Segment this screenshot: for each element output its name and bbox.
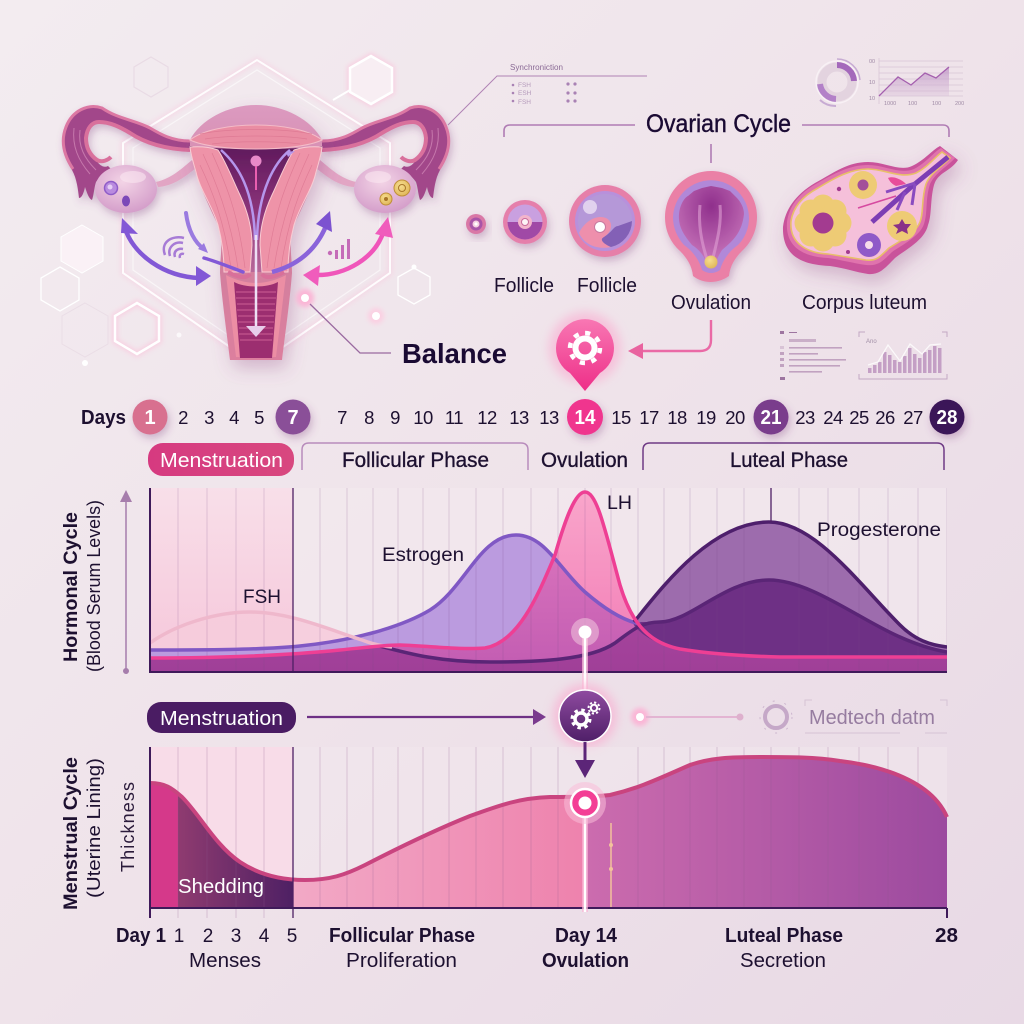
day timeline: 1 — [144, 407, 156, 429]
LH and estrogen overlap — [392, 561, 634, 660]
LH area — [556, 494, 634, 620]
phase labels: Luteal Phase — [730, 449, 848, 472]
day timeline: 26 — [875, 407, 895, 428]
menstrual cycle chart — [150, 747, 947, 918]
day timeline: 9 — [390, 407, 400, 428]
bottom axis labels: 4 — [259, 926, 270, 947]
icon: gear hub — [553, 684, 617, 748]
FSH area — [294, 620, 347, 645]
lower purple area — [151, 630, 947, 671]
bottom axis labels: Proliferation — [346, 949, 457, 972]
synchronization note: FSH — [518, 99, 531, 106]
lower dark curve — [380, 580, 947, 662]
day timeline: 17 — [639, 407, 659, 428]
bottom axis labels: 5 — [287, 926, 297, 947]
arrow: ovulation to balance pin — [628, 320, 711, 359]
day timeline: Days — [81, 407, 126, 429]
day timeline: 24 — [823, 407, 843, 428]
medtech data tag — [631, 700, 947, 733]
ovulating follicle — [665, 171, 757, 282]
bottom axis labels — [116, 924, 958, 972]
day timeline: 28 — [936, 407, 958, 429]
follicle stage 3 — [569, 185, 641, 257]
medtech data tag: Medtech datm — [809, 707, 935, 729]
ovarian stage labels: Ovulation — [671, 292, 751, 314]
line chart: 100 — [908, 101, 917, 107]
LH curve — [150, 492, 947, 658]
bottom axis labels: Menses — [189, 949, 261, 972]
left fallopian tube and ovary — [62, 106, 196, 213]
donut chart — [816, 59, 860, 106]
day timeline: 15 — [611, 407, 631, 428]
day timeline: 23 — [795, 407, 815, 428]
day timeline: 4 — [229, 407, 239, 428]
hormone labels: Progesterone — [817, 519, 941, 541]
day timeline: 8 — [364, 407, 374, 428]
icon: signal bars — [328, 239, 350, 259]
menstruation pill and arrow: Menstruation — [160, 707, 283, 730]
day timeline: 12 — [477, 407, 497, 428]
progesterone curve — [634, 522, 947, 647]
day timeline: 13 — [509, 407, 529, 428]
heading: ovarian cycle — [504, 110, 949, 163]
FSH curve — [150, 612, 392, 647]
bottom axis labels: 2 — [203, 926, 213, 947]
menstrual chart axis title: (Uterine Lining) — [84, 758, 104, 898]
day timeline: 13 — [539, 407, 559, 428]
day timeline: 5 — [254, 407, 264, 428]
day timeline: 19 — [696, 407, 716, 428]
hormonal chart axis title: (Blood Serum Levels) — [84, 500, 104, 672]
estrogen area — [151, 536, 552, 656]
day timeline: 27 — [903, 407, 923, 428]
day timeline: 14 — [574, 407, 596, 429]
hormone labels — [243, 492, 941, 608]
day timeline: 10 — [413, 407, 433, 428]
line chart: 1000 — [884, 101, 896, 107]
bottom axis labels: 1 — [174, 926, 184, 947]
corpus luteum illustration — [783, 146, 958, 274]
estrogen curve — [150, 535, 640, 650]
arrow: down to lining — [575, 742, 595, 778]
line chart: 00 — [869, 59, 875, 65]
right purple arrow — [272, 211, 332, 272]
bottom axis labels: 3 — [231, 926, 241, 947]
right fallopian tube and ovary — [316, 106, 450, 213]
day timeline: 18 — [667, 407, 687, 428]
phase labels: Follicular Phase — [342, 449, 489, 472]
decorative hexagon network — [41, 56, 430, 357]
day timeline: 7 — [337, 407, 347, 428]
follicle stage 2 — [503, 200, 547, 244]
heading: ovarian cycle: Ovarian Cycle — [646, 110, 791, 138]
synchronization note: FSH — [518, 82, 531, 89]
progesterone area — [634, 524, 947, 650]
bottom axis labels: Day 1 — [116, 924, 166, 947]
callout: balance: Balance — [402, 338, 507, 369]
ovulation marker on lining — [564, 782, 613, 912]
hormonal cycle chart — [150, 488, 947, 672]
bottom axis labels: Luteal Phase — [725, 924, 843, 947]
hormone labels: FSH — [243, 586, 281, 608]
menstrual chart axis title: Thickness — [118, 782, 138, 872]
ovarian stage labels — [494, 275, 927, 314]
line chart: 10 — [869, 96, 875, 102]
menstrual chart axis title — [61, 757, 138, 910]
phase labels: Ovulation — [541, 449, 628, 472]
lining curve — [150, 757, 947, 880]
menstrual cycle chart: Shedding — [178, 875, 264, 898]
synchronization note: ESH — [518, 90, 532, 97]
icon: gear location pin — [549, 312, 621, 391]
bottom axis labels: Ovulation — [542, 949, 629, 972]
uterine body — [190, 105, 322, 360]
phase labels — [148, 443, 944, 476]
day timeline: 3 — [204, 407, 214, 428]
hormone labels: Estrogen — [382, 544, 464, 566]
ovulation connector — [571, 618, 599, 695]
menstruation pill and arrow — [147, 702, 546, 733]
follicle stage 1 — [466, 214, 486, 234]
hormonal chart axis title — [61, 490, 132, 674]
synchronization note: Synchroniction — [510, 63, 563, 72]
grid lines — [178, 488, 947, 672]
line chart: 10 — [869, 80, 875, 86]
hormonal chart axis title: Hormonal Cycle — [61, 512, 82, 662]
day markers — [132, 399, 964, 435]
menstrual chart axis title: Menstrual Cycle — [61, 757, 82, 910]
mini data summary: Ano — [866, 339, 877, 345]
anatomical uterus illustration — [62, 105, 450, 360]
day timeline: 25 — [849, 407, 869, 428]
callout: balance — [296, 289, 507, 369]
day timeline: 11 — [445, 407, 463, 428]
bottom axis labels: Secretion — [740, 949, 826, 972]
ovarian stage labels: Corpus luteum — [802, 292, 927, 314]
phase labels: Menstruation — [160, 449, 283, 472]
left purple feedback arrow — [121, 218, 211, 286]
central downward arrow — [246, 235, 266, 337]
mini data summary — [780, 331, 947, 380]
line chart — [869, 58, 964, 107]
icon: signal waves — [164, 237, 184, 258]
luteal dark area — [632, 580, 947, 657]
ovarian stage labels: Follicle — [577, 275, 637, 297]
lining areas — [150, 747, 947, 908]
line chart: 100 — [932, 101, 941, 107]
bottom axis labels: 28 — [935, 924, 958, 947]
day timeline: 7 — [287, 407, 299, 429]
grid lines — [178, 747, 918, 918]
day timeline: 20 — [725, 407, 745, 428]
synchronization note — [448, 63, 647, 125]
line chart: 200 — [955, 101, 964, 107]
bottom axis labels: Follicular Phase — [329, 924, 475, 947]
day timeline: 2 — [178, 407, 188, 428]
bottom axis labels: Day 14 — [555, 924, 618, 947]
hormone labels: LH — [607, 492, 632, 514]
day timeline — [81, 399, 964, 435]
upper left purple arrow — [186, 213, 243, 272]
ovarian stage labels: Follicle — [494, 275, 554, 297]
day timeline: 21 — [760, 407, 782, 429]
pink feedback arrow — [303, 217, 393, 286]
